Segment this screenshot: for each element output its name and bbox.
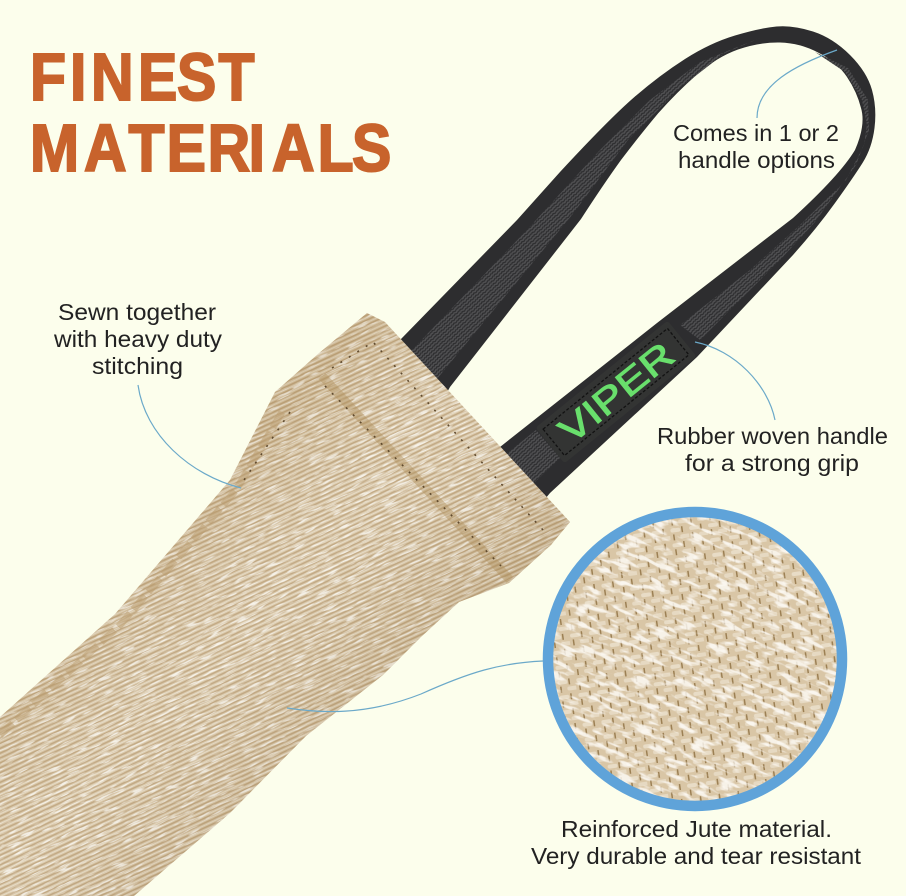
label: stitching: Sewn together (58, 299, 216, 325)
title (30, 41, 391, 186)
label: rubber handle: Rubber woven handle (657, 423, 888, 449)
title: MATERIALS (30, 112, 391, 186)
label: stitching: stitching (92, 353, 183, 379)
leader line: stitching (138, 385, 241, 488)
label: handle options: handle options (678, 147, 835, 173)
leader line: jute (287, 661, 543, 712)
label: jute material (531, 816, 862, 869)
handle strap (392, 26, 875, 505)
jute tug body (0, 313, 570, 896)
label: handle options: Comes in 1 or 2 (673, 120, 839, 146)
title: FINEST (30, 41, 255, 115)
label: handle options (673, 120, 839, 173)
seam band: side edge (0, 412, 282, 735)
zoomed jute circle (548, 512, 842, 806)
viper rubber patch: VIPER (551, 334, 682, 451)
label: jute material: Reinforced Jute material. (561, 816, 832, 842)
label: stitching (53, 299, 223, 379)
stitching rows (240, 342, 543, 566)
label: jute material: Very durable and tear resistant (531, 843, 862, 869)
label: stitching: with heavy duty (53, 326, 223, 352)
leader line: rubber handle (695, 342, 775, 420)
viper rubber patch (535, 321, 697, 463)
seam band: fold stitching (322, 376, 510, 580)
label: rubber handle (657, 423, 888, 476)
label: rubber handle: for a strong grip (685, 450, 859, 476)
leader line: handle options (757, 50, 837, 118)
